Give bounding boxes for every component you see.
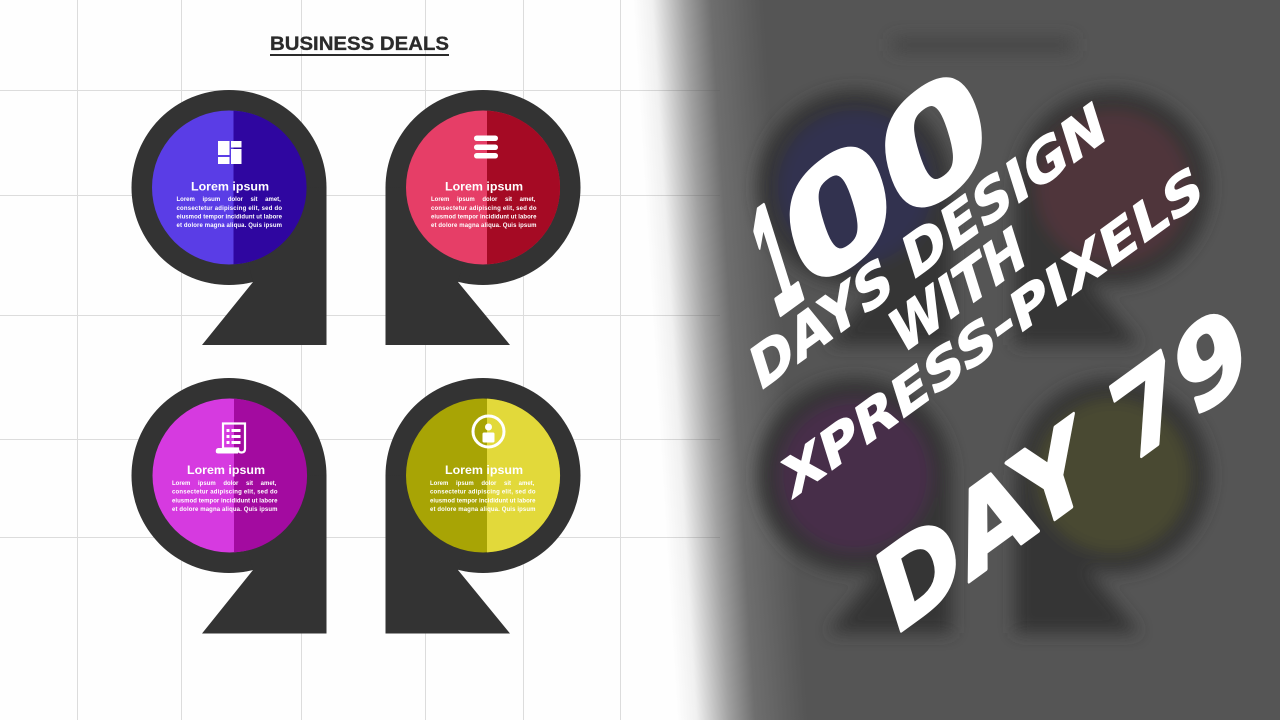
text: yellow card: eiusmod tempor incididunt ut labore [430, 498, 536, 504]
headline line: xpress-pixels: XPRESS-PIXELS [777, 153, 1209, 512]
headline line: day 79: DAY 79 [863, 280, 1262, 662]
text: blue card: Lorem ipsum [191, 180, 269, 194]
panel: magenta deal [132, 378, 326, 634]
blurred background copy [758, 38, 1210, 633]
text: red card: consectetur adipiscing elit, sed do [431, 206, 537, 212]
panel: red deal [386, 90, 580, 345]
fade overlay [600, 0, 1280, 720]
disc: red [406, 110, 560, 264]
text: red card: Lorem ipsum dolor sit amet, [431, 197, 536, 203]
pin shape: magenta [132, 378, 326, 634]
pin shape: yellow [386, 378, 580, 634]
text: magenta card: Lorem ipsum [187, 463, 265, 477]
text: red card [431, 180, 537, 229]
text: yellow card: et dolore magna aliqua. Quis ipsum [430, 507, 536, 513]
disc: blue [152, 110, 307, 264]
icon: tile grid [218, 141, 242, 164]
text: yellow card: Lorem ipsum dolor sit amet, [430, 481, 535, 487]
headline line: days design: DAYS DESIGN [743, 88, 1113, 405]
panel: blue deal [132, 90, 326, 345]
headline line: with: WITH [884, 212, 1032, 369]
text: red card: Lorem ipsum [445, 180, 523, 194]
text: magenta card: eiusmod tempor incididunt ut labore [172, 498, 278, 504]
text: yellow card: Lorem ipsum [445, 463, 523, 477]
text: red card: eiusmod tempor incididunt ut labore [431, 214, 537, 220]
headline number: 100: 100 [736, 27, 1007, 348]
pin shape: blue [132, 90, 326, 345]
icon: menu bars [474, 136, 498, 158]
text: magenta card [172, 463, 278, 513]
text: magenta card: et dolore magna aliqua. Quis ipsum [172, 507, 278, 513]
text: blue card: eiusmod tempor incididunt ut labore [176, 214, 283, 220]
pin shape: red [386, 90, 580, 345]
headline: 100 days design with xpress-pixels day 79 [736, 27, 1262, 662]
text: yellow card: consectetur adipiscing elit, sed do [430, 490, 536, 496]
panel: yellow deal [386, 378, 580, 634]
disc: yellow [406, 398, 560, 552]
text: blue card: Lorem ipsum dolor sit amet, [176, 197, 281, 203]
text: magenta card: consectetur adipiscing elit, sed do [172, 490, 278, 496]
text: red card: et dolore magna aliqua. Quis ipsum [431, 223, 536, 229]
text: blue card: et dolore magna aliqua. Quis ipsum [176, 223, 282, 229]
title: BUSINESS DEALS [270, 33, 449, 55]
text: yellow card [430, 463, 536, 513]
text: blue card: consectetur adipiscing elit, sed do [176, 206, 282, 212]
icon: document scroll [216, 424, 245, 454]
text: blue card [176, 180, 283, 229]
text: magenta card: Lorem ipsum dolor sit amet, [172, 481, 277, 487]
disc: magenta [152, 398, 307, 552]
icon: person badge [473, 416, 504, 447]
